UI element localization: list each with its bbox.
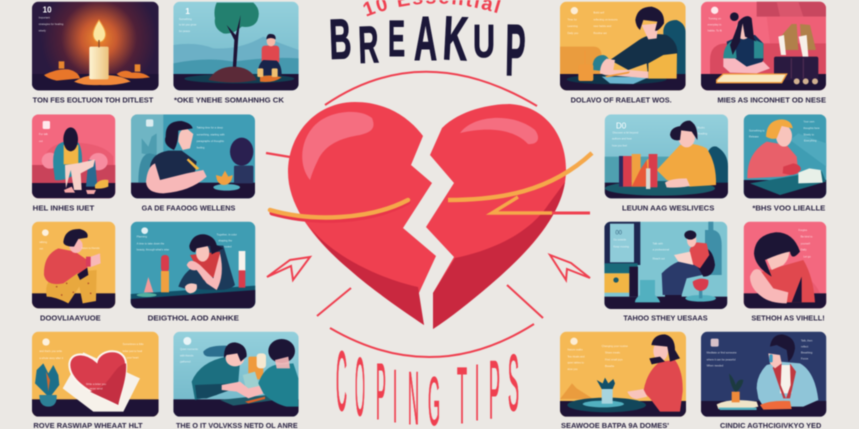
card small text: Quiet moments [180, 347, 199, 351]
card small text: Talk, then [801, 338, 813, 342]
title: BREAKUP: E [388, 11, 405, 67]
card number: 00 [615, 230, 623, 236]
caption: TAHOO STHEY UESAAS [623, 313, 708, 322]
card small text: Something to [749, 129, 765, 133]
right heart highlight [460, 118, 538, 144]
caption: MIES AS INCONHET OD NESE [717, 96, 826, 105]
card icon [571, 7, 578, 14]
card small text: where it can be peaceful [707, 358, 736, 362]
card small text: wisely [39, 28, 47, 32]
decorative arc above heart [325, 72, 537, 106]
card small text: Sometimes a little [123, 342, 144, 346]
panel: self hug card [744, 222, 826, 322]
card small text: Write a letter you [86, 382, 107, 386]
caption: HEL INHES IUET [33, 203, 95, 212]
caption: SETHOH AS VIHELL! [751, 313, 825, 322]
card small text [613, 237, 670, 260]
left accent line [266, 153, 290, 157]
card small text: Your own [803, 120, 815, 124]
right heart shade [433, 182, 565, 329]
card small text: habits. To fit [708, 29, 722, 33]
card small text [137, 233, 237, 251]
card small text: Reach out [653, 256, 665, 260]
panel: sofa card [32, 114, 115, 212]
card small text: For talk [39, 132, 49, 136]
card small text: Daily [801, 247, 807, 251]
card small text: Keep moving [613, 245, 629, 249]
panel: desk note card [560, 2, 686, 105]
card small text [39, 342, 144, 390]
card small text: a professional [653, 248, 670, 252]
card small text: new habits and [593, 24, 612, 28]
left lower accent line [317, 288, 351, 316]
broken heart illustration [288, 102, 566, 329]
right heart half [426, 104, 566, 329]
card small text: Be kind to [801, 235, 813, 239]
card small text: Focus [801, 356, 809, 360]
card icon [43, 121, 50, 129]
card small text: with friends [180, 353, 194, 357]
card icon [183, 337, 191, 345]
card small text [708, 16, 722, 33]
card small text: Everything [804, 139, 817, 143]
card small text: to let you grow [179, 23, 196, 27]
card small text: Important [39, 16, 50, 20]
right arrow [550, 255, 590, 280]
card small text: for peace [179, 29, 191, 33]
card icon [141, 227, 148, 234]
card icon [570, 338, 578, 345]
card small text: Find small joys [605, 357, 623, 361]
card small text: and that's you write [39, 349, 63, 353]
card small text: Forgive [798, 228, 808, 232]
card small text: everyday to [708, 22, 722, 26]
left heart highlight [302, 112, 374, 180]
title: BREAKUP: U [473, 16, 495, 68]
card small text: a whole story after it [39, 356, 63, 360]
right lower accent line [507, 285, 543, 318]
card icon [42, 229, 49, 236]
card small text: Turning on [708, 16, 721, 20]
card small text: how you feel [612, 143, 627, 147]
decorative arc below heart [330, 324, 534, 357]
card small text [612, 126, 708, 147]
card small text: Routine set [593, 31, 607, 35]
card small text: slow you [567, 367, 578, 371]
card small text: feeling [197, 145, 205, 149]
panel: tea table card [560, 332, 686, 429]
card small text: Build self [593, 11, 604, 15]
title: BREAKUP: R [357, 15, 380, 74]
left arrow [267, 257, 310, 280]
card small text: Books [697, 126, 705, 130]
card small text: out [39, 247, 43, 251]
left heart shade [307, 223, 424, 325]
card number: 10 [43, 6, 52, 15]
card small text: Nature walks [567, 348, 583, 352]
card small text: yourself [801, 241, 810, 245]
caption: LEUUN AAG WESLIVECS [622, 203, 714, 212]
caption: *OKE YNEHE SOMAHNHG CK [174, 96, 285, 105]
panel: pink room card [701, 2, 826, 105]
card small text: Changing your routine [602, 344, 628, 348]
right orange swoosh with zigzag [448, 153, 592, 213]
title: BREAKUP: P [505, 10, 526, 91]
card small text: Something [179, 17, 192, 21]
card small text: reflecting on lessons [593, 18, 618, 22]
card small text: Go outside [613, 237, 627, 241]
card small text: gathered [180, 360, 191, 364]
card small text: Taking time for a deep [197, 126, 223, 130]
card small text [567, 11, 618, 35]
card small text [197, 126, 225, 149]
card small text: A time to take down the [137, 241, 165, 245]
card small text [749, 120, 820, 143]
card icon [711, 7, 718, 14]
card small text: Daily you [567, 31, 579, 35]
card icon [711, 339, 719, 347]
card small text: letter just to heal [123, 349, 143, 353]
card small text: Breathing [801, 350, 813, 354]
caption: DOOVLIAAYUOE [40, 313, 101, 322]
card small text: Planning [137, 235, 148, 239]
card small text: talking [39, 240, 48, 244]
card small text: beauty, through what's wise [137, 247, 170, 251]
card small text: Talk with [653, 241, 663, 245]
title: COPING TIPS: C [336, 333, 347, 428]
panel: two people card [173, 332, 299, 429]
card small text: When needed [707, 364, 724, 368]
panel: candle card [32, 2, 159, 105]
card small text: quiet tables to [567, 360, 584, 364]
card number: D0 [616, 121, 627, 130]
card small text: Breathe [605, 364, 615, 368]
title: BREAKUP: B [328, 7, 352, 71]
card small text: shaping the [218, 239, 233, 243]
title: COPING TIPS: S [508, 339, 519, 428]
card small text: Tea rituals and [567, 355, 585, 359]
card small text [707, 338, 813, 368]
panel: sitting with phone card [32, 222, 115, 322]
panel: heart letter card [32, 332, 159, 429]
card small text: your heart [127, 355, 139, 359]
panel: pink sweater card [744, 114, 826, 212]
title: BREAKUP [328, 3, 526, 91]
card small text: thoughts here [803, 126, 820, 130]
caption: *BHS VOO LIEALLE [752, 203, 825, 212]
card small text: something, starting with [197, 133, 225, 137]
card small text: Let go [803, 254, 811, 258]
card icon [42, 338, 50, 346]
card small text: out [39, 139, 43, 143]
title: BREAKUP: A [414, 3, 437, 74]
card small text: Meditate or find someone [707, 351, 737, 355]
panel: books card [605, 114, 728, 212]
card small text: Learning [567, 24, 578, 28]
title: COPING TIPS [336, 333, 519, 429]
caption: GA DE FAAOOG WELLENS [142, 203, 235, 212]
panel: bottles table card [131, 222, 255, 322]
panel: navy plant card [701, 332, 826, 429]
title: BREAKUP: K [441, 3, 470, 74]
card small text: paragraphs of thoughts [197, 139, 225, 143]
card small text [39, 132, 49, 143]
card number: 1 [185, 7, 190, 16]
card small text [180, 347, 199, 364]
card small text [39, 16, 64, 32]
caption: DEIGTHOL AOD ANHKE [148, 313, 239, 322]
card small text [567, 344, 628, 371]
card small text: never send [89, 386, 103, 390]
card small text: Share meals [605, 350, 621, 354]
card small text: Release [749, 135, 759, 139]
card small text [179, 17, 196, 33]
caption: TON FES EOLTUON TOH DITLEST [33, 96, 154, 105]
panel: writing journal card [131, 114, 255, 212]
card small text: authors and how [612, 136, 632, 140]
card small text: rooted [224, 245, 232, 249]
panel: sitting room card [604, 222, 727, 322]
card small text: Reading [697, 131, 708, 135]
card small text: Time for [567, 18, 577, 22]
card small text [798, 228, 813, 258]
panel: tree planting card [173, 2, 299, 105]
caption: DOLAVO OF RAELAET WOS. [571, 96, 672, 105]
card small text: listen to friends [82, 246, 100, 250]
card icon [146, 119, 153, 127]
card small text: reflect [801, 345, 808, 349]
card small text: strategies for healing [39, 22, 64, 26]
card small text [39, 240, 100, 250]
card small text: Discover a bit beyond [613, 130, 639, 134]
card small text: Together, in color [217, 233, 237, 237]
card small text: Slowly to [803, 132, 814, 136]
left heart half [288, 102, 436, 325]
left orange swoosh [270, 200, 408, 220]
